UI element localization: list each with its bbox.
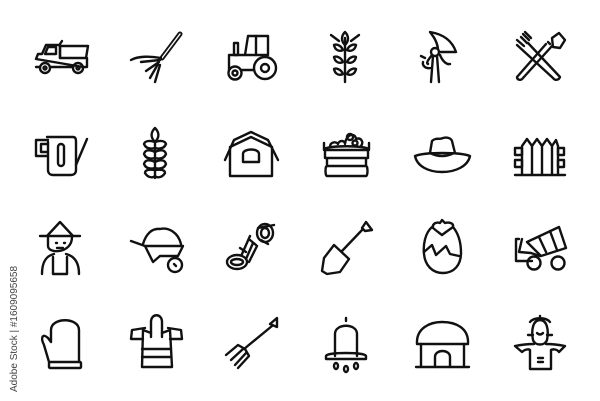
icon: watering can <box>36 137 87 175</box>
icon: cowboy hat <box>415 138 470 172</box>
icon: shovel <box>322 222 372 274</box>
icon: wheelbarrow <box>131 229 183 272</box>
icon: rake <box>131 34 180 82</box>
icon: fence <box>515 139 565 175</box>
icon: eggplant <box>424 220 461 273</box>
icon: wheat stalk <box>331 32 359 82</box>
icon: dump truck <box>36 41 88 73</box>
icon: wheat ear <box>144 128 166 178</box>
icon: crossed shovel and fork <box>517 32 565 80</box>
icon: scarecrow <box>515 316 565 369</box>
icon: hut <box>416 322 469 367</box>
icon: bell <box>326 318 366 372</box>
icon: dump trailer <box>516 227 566 270</box>
icon: tractor <box>228 36 276 80</box>
icon: vest <box>131 315 182 367</box>
icon: oven mitt <box>42 320 81 368</box>
icon: rope <box>227 224 274 269</box>
credit text: Adobe Stock | #1609095658 <box>9 266 20 392</box>
icon: pitchfork <box>226 318 277 368</box>
icon: barn <box>225 132 278 176</box>
icon: basket of vegetables <box>324 134 369 176</box>
icon: windmill <box>421 32 456 82</box>
icon: farmer <box>40 222 80 274</box>
